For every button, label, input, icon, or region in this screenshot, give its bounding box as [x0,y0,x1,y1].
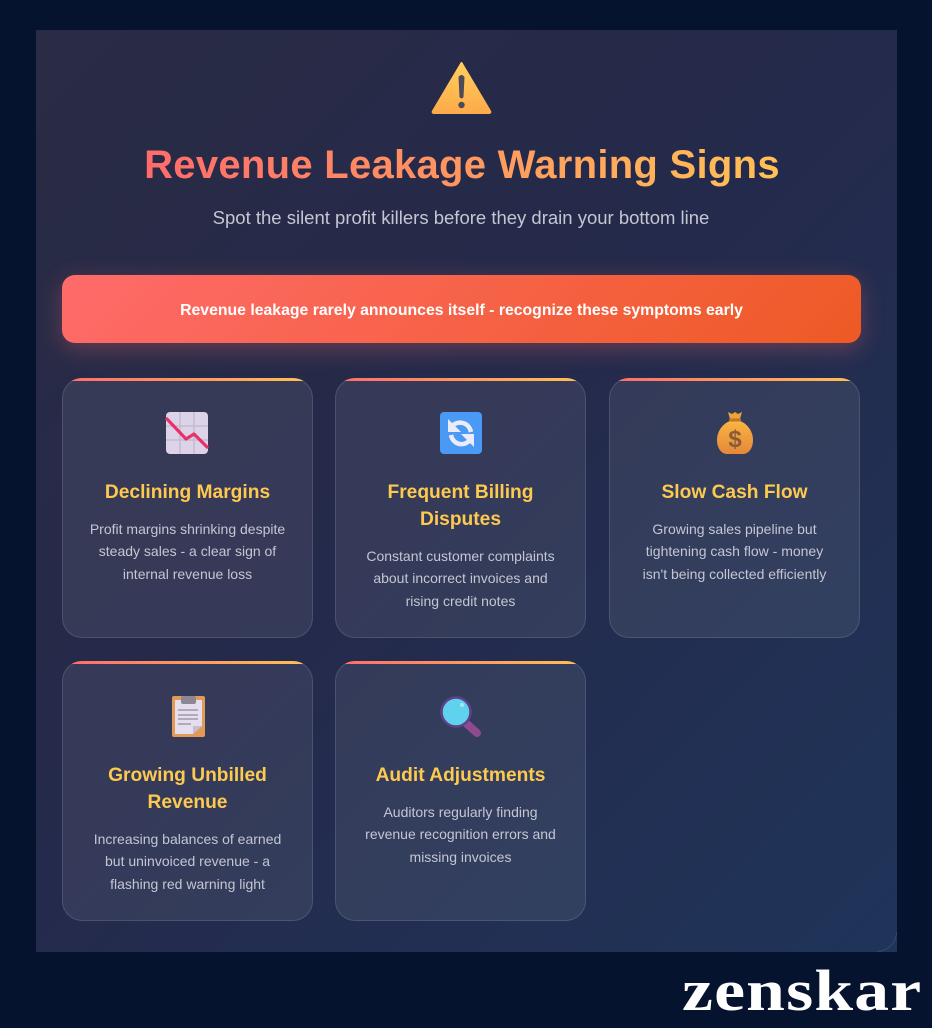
description: isn't being collected efficiently [643,566,826,582]
description: flashing red warning light [110,876,265,892]
icon: money bag: $ [728,426,742,453]
icon: money bag [717,412,753,454]
heading [387,482,534,530]
heading: Audit Adjustments [376,765,545,786]
panel: card Growing Unbilled Revenue [62,661,313,921]
panel: card Declining Margins [62,378,313,638]
description: tightening cash flow - money [646,543,823,559]
description: about incorrect invoices and [373,570,548,586]
description: Auditors regularly finding [383,804,538,820]
description: but uninvoiced revenue - a [105,853,270,869]
logo: zenskar: zenskar [682,958,922,1023]
panel: card Audit Adjustments [335,661,586,921]
icon: magnifying glass [440,696,481,737]
heading: Revenue [148,792,227,813]
heading: Growing Unbilled [108,765,267,786]
panel: card Slow Cash Flow [609,378,860,638]
description: internal revenue loss [123,566,252,582]
description: Increasing balances of earned [94,831,281,847]
description: steady sales - a clear sign of [99,543,276,559]
title: Revenue Leakage Warning Signs [144,143,780,187]
subtitle: Spot the silent profit killers before they drain your bottom line [213,207,709,228]
description: Constant customer complaints [366,548,555,564]
heading [108,765,267,813]
icon: refresh arrows [440,412,482,454]
panel: card Frequent Billing Disputes [335,378,586,638]
description: Growing sales pipeline but [652,521,817,537]
heading: Frequent Billing [387,482,534,503]
description [90,521,285,582]
icon: clipboard [172,696,205,737]
description: rising credit notes [406,593,515,609]
banner callout [62,275,861,343]
icon: warning triangle [432,62,492,114]
description: missing invoices [410,849,511,865]
heading: Disputes [420,509,501,530]
description: Profit margins shrinking despite [90,521,285,537]
description [94,831,281,892]
description [366,548,555,609]
description: revenue recognition errors and [365,826,556,842]
description [365,804,556,865]
heading: Slow Cash Flow [661,482,808,503]
icon: declining chart [165,412,209,454]
description [643,521,826,582]
banner callout: Revenue leakage rarely announces itself - recognize these symptoms early [180,302,743,319]
heading: Declining Margins [105,482,270,503]
